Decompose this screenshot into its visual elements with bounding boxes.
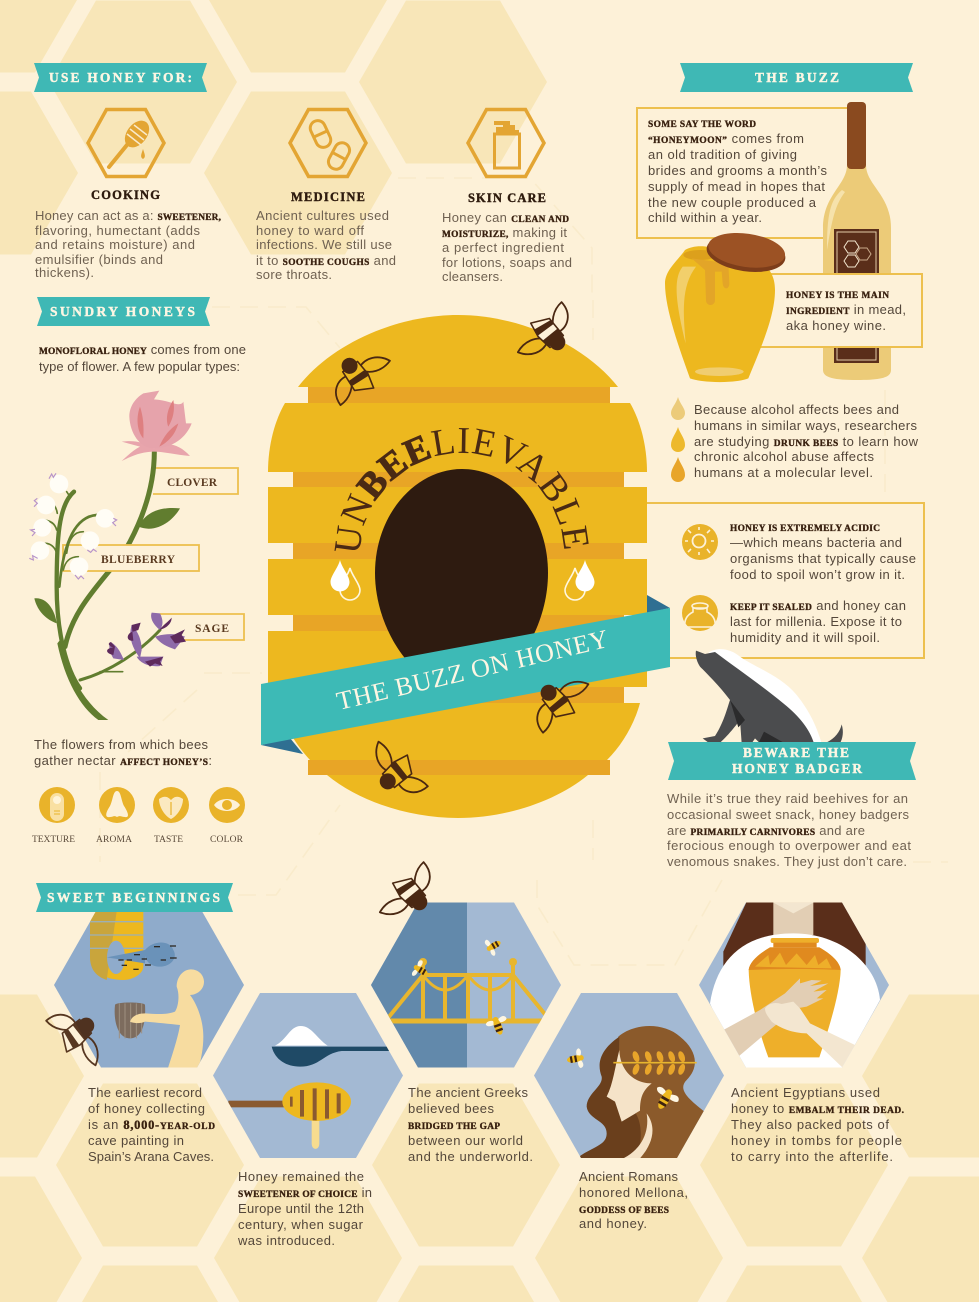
hexagon: sugar and honey spoons [213,993,403,1158]
panel: cooking [35,110,221,280]
text: sealed: last for millenia. Expose it to [730,614,902,629]
text: flowers affect honey [34,737,212,768]
text: skin care: MOISTURIZE, making it [442,225,567,240]
label: blueberry: BLUEBERRY [101,554,176,566]
text: honeymoon: an old tradition of giving [648,147,797,162]
text: honeymoon [648,120,828,225]
heading: skin care: SKIN CARE [468,191,546,205]
text: greeks: believed bees [408,1101,494,1116]
label box: blueberry [63,545,199,571]
text: medicine: honey to ward off [256,223,364,238]
text: sweetener of choice: was introduced. [237,1233,335,1248]
banner: beware the honey badger: BEWARE THE [743,745,849,760]
illustration: blueberry and sage [29,473,186,720]
text: cooking [35,208,221,280]
bees: mellona [565,1048,681,1115]
bee: hive top right [509,298,585,372]
text: egyptians: Ancient Egyptians used [731,1085,880,1100]
panel: medicine [256,110,396,282]
icon: aroma [99,787,135,823]
illustration: honey badger [696,649,843,747]
callout: main ingredient box: INGREDIENT in mead, [786,302,906,317]
text: romans: GODDESS OF BEES [579,1206,669,1216]
text: egyptians: honey in tombs for people [731,1133,902,1148]
bee: hive left [320,339,397,409]
text: cave painting: is an 8,000-YEAR-OLD [88,1117,215,1132]
text: drunk bees: humans in similar ways, researchers [694,418,918,433]
text: cooking: thickens). [35,265,94,280]
panel: acidic box [646,503,924,658]
text: sweetener of choice: SWEETENER OF CHOICE in [238,1185,372,1200]
text: drunk bees: humans at a molecular level. [694,465,873,480]
text: honeymoon: brides and grooms a month’s [648,163,828,178]
callout: main ingredient box: aka honey wine. [786,318,886,333]
text: drunk bees: chronic alcohol abuse affects [694,449,874,464]
label: taste: TASTE [154,835,183,845]
text: honey badger: While it’s true they raid beehives for an [667,791,908,806]
illustration: clover [65,391,192,647]
ribbon: the buzz on honey: THE BUZZ ON HONEY [334,624,611,716]
text: skin care: cleansers. [442,269,503,284]
ribbon: the buzz on honey [261,595,670,754]
icon: honey dipper [88,110,164,176]
sage flowers [107,613,186,667]
text: medicine: Ancient cultures used [256,208,389,223]
text: sealed: humidity and it will spoil. [730,630,880,645]
bee: bridge top [371,858,447,932]
text: egyptians [731,1085,904,1164]
text: medicine [256,208,396,282]
text: acidic [730,524,916,582]
text: drunk bees: Because alcohol affects bees and [694,402,899,417]
text: acidic: HONEY IS EXTREMELY ACIDIC [730,524,880,534]
icon: taste [153,787,189,823]
text: cave painting: Spain’s Arana Caves. [88,1149,214,1164]
text: sweetener of choice: Honey remained the [238,1169,364,1184]
text: cooking: flavoring, humectant (adds [35,223,200,238]
text: cooking: emulsifier (binds and [35,252,163,267]
text: egyptians: honey to EMBALM THEIR DEAD. [731,1101,904,1116]
icon: sealed jar [682,595,718,631]
text: sweetener of choice: Europe until the 12th [238,1201,364,1216]
icon: white drops left [330,560,360,600]
banner: sweet beginnings: SWEET BEGINNINGS [47,890,220,905]
text: sealed: KEEP IT SEALED and honey can [730,598,906,613]
panel: skin care [442,110,572,284]
hexagon: egyptian urn [699,902,889,1072]
leaf [34,598,57,623]
hexagon: cave painting [54,902,244,1070]
text: egyptians: to carry into the afterlife. [731,1149,893,1164]
hive entrance [375,469,548,690]
text: greeks [408,1085,533,1164]
text: honeymoon: “HONEYMOON” comes from [648,131,804,146]
text: honey badger: occasional sweet snack, honey badgers [667,807,910,822]
text: monofloral: type of flower. A few popular types: [39,359,240,374]
text: monofloral [39,342,246,374]
text: cave painting: The earliest record [88,1085,202,1100]
text: romans: Ancient Romans [579,1169,678,1184]
text: sweetener of choice [237,1169,372,1248]
banner: the buzz [680,63,913,92]
label: aroma: AROMA [96,835,132,845]
callout: main ingredient box: HONEY IS THE MAIN [786,291,889,301]
text: romans: honored Mellona, [579,1185,688,1200]
hexagon: bridge [370,900,561,1070]
text: greeks: BRIDGED THE GAP [408,1122,500,1132]
illustration: honey jar [665,228,788,382]
text: honey badger: are PRIMARILY CARNIVORES and are [667,823,865,838]
heading: medicine: MEDICINE [291,190,365,204]
icon: pump bottle [468,110,544,176]
text: drunk bees [694,402,919,480]
text: sealed [730,598,906,645]
callout: main ingredient box [758,274,922,347]
text: acidic: food to spoil won’t grow in it. [730,567,905,582]
text: drunk bees: are studying DRUNK BEES to learn how [694,434,919,449]
text: medicine: it to SOOTHE COUGHS and [256,253,396,268]
text: cooking: Honey can act as a: SWEETENER, [35,208,221,223]
banner: beware the honey badger: HONEY BADGER [732,761,862,776]
panel: the buzz box [637,108,847,238]
bee: hive bottom [358,733,432,809]
text: honeymoon: child within a year. [648,210,762,225]
bee: cave painting [42,998,116,1074]
banner: sundry honeys [37,297,210,326]
text: flowers affect honey: The flowers from which bees [34,737,208,752]
text: skin care: a perfect ingredient [442,240,564,255]
text: flowers affect honey: gather nectar AFFECT HONEY’S: [34,753,212,768]
text: honey badger: ferocious enough to overpower and eat [667,838,911,853]
text: egyptians: They also packed pots of [731,1117,889,1132]
text: greeks: between our world [408,1133,523,1148]
banner: sweet beginnings [36,883,233,912]
illustration: mead bottle [823,102,891,380]
text: cave painting: cave painting in [88,1133,184,1148]
banner: the buzz: THE BUZZ [755,70,839,85]
label: clover: CLOVER [167,477,218,489]
text: cave painting: of honey collecting [88,1101,205,1116]
icon: honey drops [671,397,685,482]
label: texture: TEXTURE [32,835,75,845]
banner: sundry honeys: SUNDRY HONEYS [50,304,195,319]
text: acidic: —which means bacteria and [730,535,902,550]
text: medicine: infections. We still use [256,237,392,252]
text: skin care: Honey can CLEAN AND [442,210,569,225]
text: honey badger: venomous snakes. They just don’t care. [667,854,907,869]
bee: on ribbon [521,663,597,737]
text: greeks: and the underworld. [408,1149,533,1164]
text: greeks: The ancient Greeks [408,1085,528,1100]
text: honeymoon: SOME SAY THE WORD [648,120,756,130]
text: honeymoon: the new couple produced a [648,195,817,210]
banner: use honey for [34,63,207,92]
text: medicine: sore throats. [256,267,332,282]
text: acidic: organisms that typically cause [730,551,916,566]
stems [42,492,160,688]
banner: use honey for: USE HONEY FOR: [49,70,192,85]
banner: beware the honey badger [668,742,916,780]
text: skin care [442,210,572,284]
icon: color [209,787,245,823]
text: romans: and honey. [579,1216,647,1231]
label boxes: clover and sage [153,468,244,640]
icon: white drops right [565,560,594,600]
title: unbeelievable: UNBEELIEVABLE [334,428,589,551]
text: cave painting [88,1085,215,1164]
label: color: COLOR [210,835,244,845]
text: honey badger [667,791,911,869]
icon: texture [39,787,75,823]
text: honeymoon: supply of mead in hopes that [648,179,825,194]
icon: pills [290,110,366,176]
hexagon: mellona [534,993,724,1160]
icon row: honey qualities [32,787,245,845]
text: romans [579,1169,688,1231]
bees: bridge [410,934,511,1038]
text: cooking: and retains moisture) and [35,237,195,252]
text: monofloral: MONOFLORAL HONEY comes from one [39,342,246,357]
blueberry flowers [31,475,114,576]
label: sage: SAGE [195,623,229,635]
icon: bacteria [682,524,718,560]
text: skin care: for lotions, soaps and [442,255,572,270]
hive [268,315,647,818]
text: sweetener of choice: century, when sugar [238,1217,364,1232]
heading: cooking: COOKING [91,188,160,202]
